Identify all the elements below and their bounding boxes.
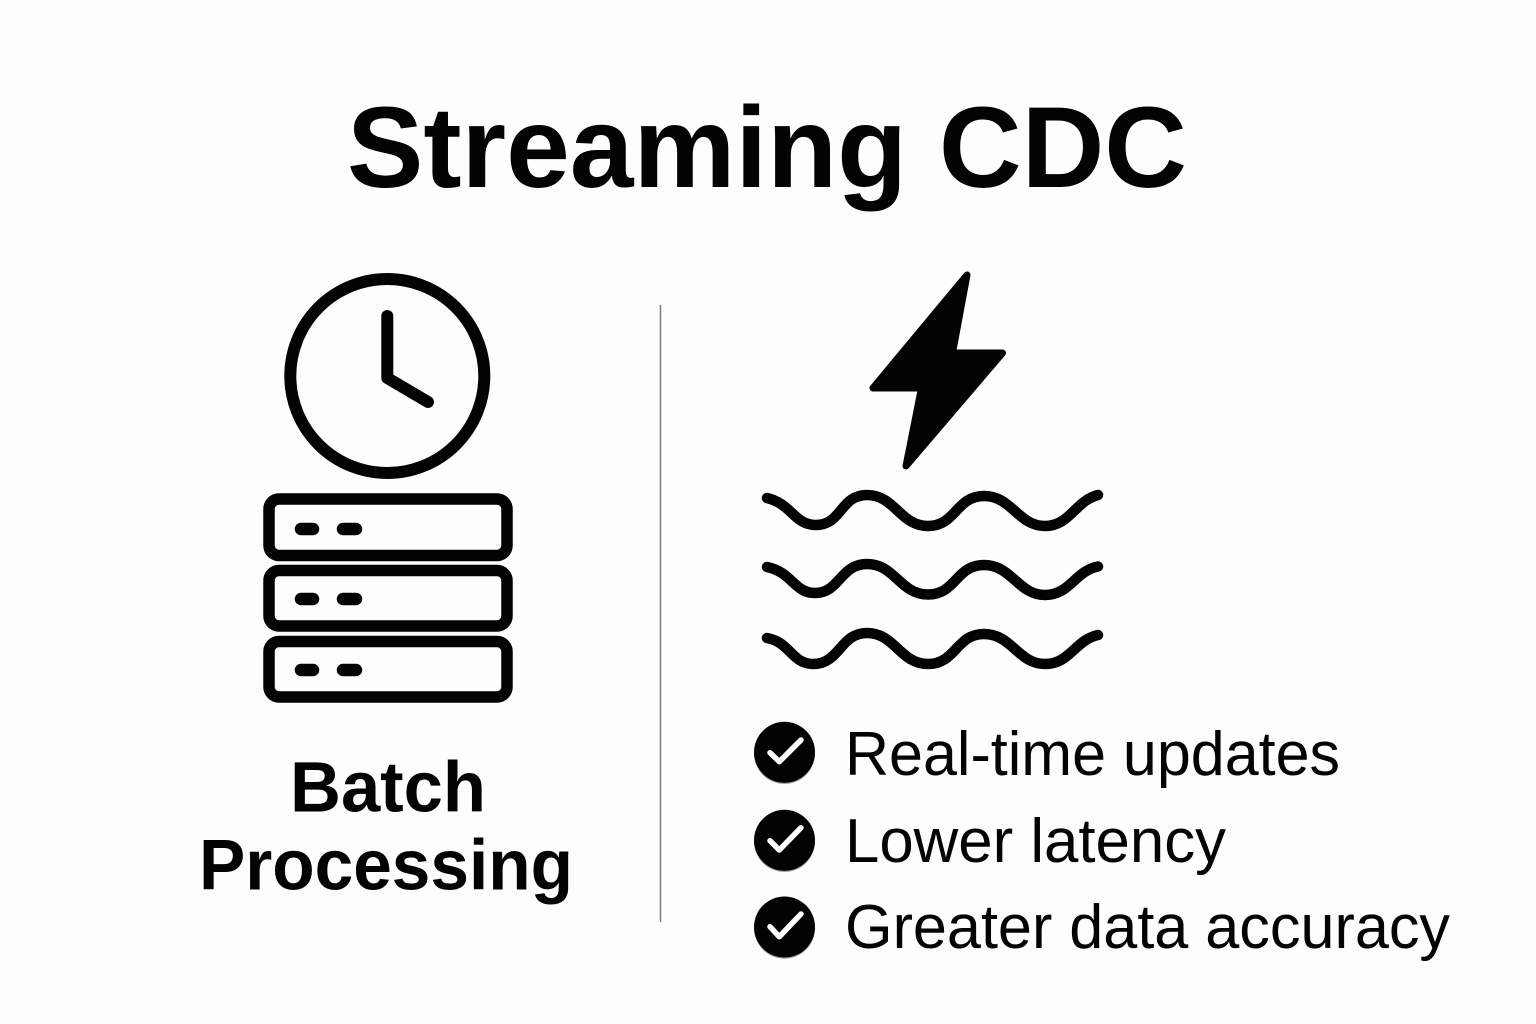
- icon: streaming waves: [767, 495, 1098, 664]
- icon: clock: [290, 279, 484, 473]
- heading: batch processing: Batch: [290, 748, 486, 828]
- center divider: [660, 305, 662, 922]
- icon: server stack: [269, 499, 507, 697]
- benefit: real-time updates: Real-time updates: [845, 720, 1340, 789]
- heading: batch processing: Processing: [199, 826, 573, 906]
- benefit list: [754, 720, 1450, 962]
- heading: batch processing: [199, 748, 573, 906]
- icon: lightning bolt: [873, 275, 1002, 466]
- title: Streaming CDC: [347, 84, 1187, 212]
- benefit: lower latency: Lower latency: [845, 807, 1226, 876]
- benefit: greater data accuracy: Greater data accuracy: [845, 893, 1450, 962]
